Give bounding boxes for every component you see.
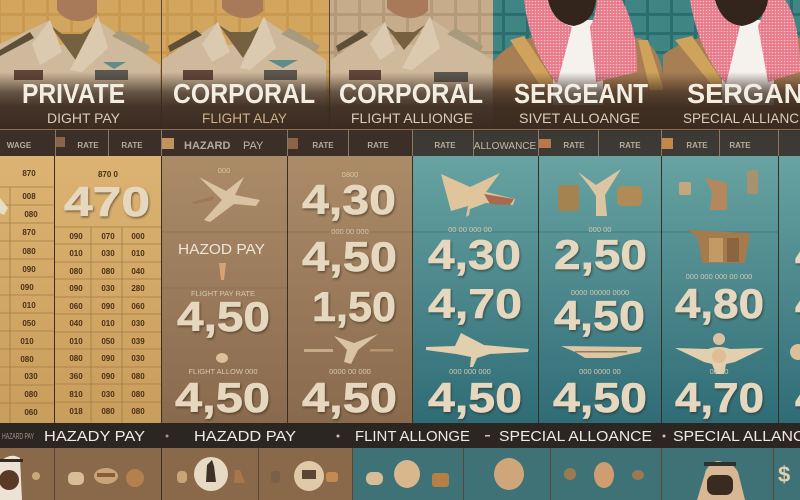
icon: pay badges: [68, 468, 144, 487]
column: special allowance: [539, 156, 661, 423]
column: private main table: 090: [101, 354, 115, 363]
column: private left table: 050: [22, 319, 36, 328]
table header row: RATE: [367, 141, 389, 150]
icon: private soldier: [0, 0, 160, 130]
icon: badge cluster: [679, 170, 758, 210]
table header row: HAZARD: [184, 140, 230, 152]
number: 4,50 lower: 4,50: [175, 374, 270, 421]
number: 4,50: 4,50: [554, 292, 645, 339]
column: corporal rates: 000 00 000: [331, 227, 369, 236]
bottom panel: teal first: [353, 448, 463, 500]
table header row: RATE: [563, 141, 585, 150]
column: private main table: 010: [131, 249, 145, 258]
column: special allowance: 000 00: [589, 225, 611, 234]
column: hazard pay: 000: [218, 166, 230, 175]
column: private main table: 060: [69, 302, 83, 311]
bottom panel: teal third: [551, 448, 661, 500]
column: private main table: 039: [131, 337, 145, 346]
column: private main table: 080: [131, 407, 145, 416]
column: private left table: 080: [24, 210, 38, 219]
column: special allowance second: 00 00: [710, 367, 728, 376]
icon: small coin: [32, 472, 40, 480]
column: private main table: 080: [69, 267, 83, 276]
column: private main table: 080: [131, 372, 145, 381]
table header row: RATE: [434, 141, 456, 150]
footer band: [0, 423, 800, 448]
table header row: WAGE: [7, 141, 32, 150]
column: private main table: 050: [101, 337, 115, 346]
column: private main table: 060: [131, 302, 145, 311]
number: 2,50: 2,50: [554, 231, 647, 278]
icon: sergeant in thobe and shemagh: [493, 0, 664, 130]
label: hazard pay: HAZOD PAY: [178, 241, 265, 258]
icon: corporal soldier: [162, 0, 326, 130]
icon: dollar sign: $: [778, 462, 790, 487]
column: private main table: 080: [101, 407, 115, 416]
number: 4,30: 4,30: [302, 176, 396, 223]
footer band: HAZARD PAY: [2, 432, 34, 441]
column: private main table: 030: [131, 354, 145, 363]
table header row: RATE: [686, 141, 708, 150]
number: 4,50: 4,50: [177, 293, 270, 340]
column: private main table: 090: [101, 372, 115, 381]
table header row: PAY: [243, 140, 264, 152]
icon: treasure chest: [688, 230, 750, 263]
heading: sergeant: SERGEANT: [514, 78, 648, 109]
footer band: FLINT ALLONGE: [355, 428, 470, 445]
column: private main table: 870 0: [98, 170, 119, 179]
subheading: corporal second: FLIGHT ALLIONGE: [351, 110, 473, 126]
heading: corporal: CORPORAL: [173, 78, 315, 109]
column: private left table: 870: [22, 228, 36, 237]
bottom panel: brown left: [0, 448, 161, 500]
number: 4,70: 4,70: [428, 280, 522, 327]
number: 4,70: 470: [64, 178, 150, 225]
column: private main table: 000: [131, 232, 145, 241]
table header row: RATE: [121, 141, 143, 150]
icon: large coin: [494, 458, 524, 490]
icon: small medal: [216, 353, 228, 363]
panel: sergeant special portrait: [663, 0, 800, 130]
column: private left table: 870: [22, 169, 36, 178]
column: corporal rates: 0800: [342, 170, 358, 179]
icon: sergeant special in thobe and shemagh: [663, 0, 800, 130]
column: special allowance second: 000 000 000 00 000: [686, 272, 752, 281]
number: 4,50: 4,50: [302, 233, 397, 280]
column: private main table: 070: [101, 232, 115, 241]
footer band: HAZADY PAY: [44, 428, 145, 445]
number: 4,70: 4,70: [675, 374, 764, 421]
panel: corporal portrait: [162, 0, 329, 130]
column: flight allowance: 000 000 000: [449, 367, 491, 376]
column: private left table: 030: [24, 372, 38, 381]
column: special allowance: 0000 00000 0000: [571, 288, 629, 297]
panel: private portrait: [0, 0, 161, 130]
table header row: RATE: [619, 141, 641, 150]
column: private main table: 090: [69, 284, 83, 293]
icon: tokens: [564, 462, 644, 488]
heading: private: PRIVATE: [22, 78, 125, 109]
column dividers: [54, 156, 779, 500]
column: corporal rates: [288, 156, 412, 423]
number: 4,80: 4,80: [675, 280, 764, 327]
number: 1,50: 1,50: [312, 283, 396, 330]
footer band: HAZADD PAY: [194, 428, 296, 445]
column: private main table: 010: [69, 249, 83, 258]
bottom panel: teal second: [464, 448, 550, 500]
column: right edge: [779, 156, 800, 423]
column: private main table: 010: [69, 337, 83, 346]
icon: winged emblem: [675, 333, 764, 374]
icon: jet: [441, 173, 515, 217]
column: private main table: 280: [131, 284, 145, 293]
icon: coin with figure: [177, 457, 245, 491]
column: private main table: 360: [69, 372, 83, 381]
column: flight allowance: [413, 156, 538, 423]
icon: robed figure: [0, 456, 23, 500]
icon: robed figure: [697, 461, 745, 500]
bottom panel: teal fourth: [662, 448, 773, 500]
column: hazard pay: FLIGHT PAY RATE: [191, 289, 255, 298]
panel: corporal flight portrait: [330, 0, 493, 130]
column: private main table: 010: [101, 319, 115, 328]
fade behind rank titles: [0, 72, 800, 130]
footer band: SPECIAL ALLOANCE: [499, 428, 652, 445]
column: private left table: 090: [22, 265, 36, 274]
table header row: [0, 129, 800, 156]
icon: small marker: [219, 263, 226, 280]
table header row: RATE: [729, 141, 751, 150]
panel: sergeant portrait: [493, 0, 664, 130]
column: private main table: 080: [131, 390, 145, 399]
column: private main table: 040: [131, 267, 145, 276]
column: private main table: 040: [69, 319, 83, 328]
column: private main table: 030: [131, 319, 145, 328]
column: private main table: [55, 156, 161, 423]
bottom panel: teal edge: [774, 448, 800, 500]
column: private left table: 010: [20, 337, 34, 346]
number: 4,50 lower: 4,50: [302, 374, 397, 421]
column: private left table: 080: [22, 247, 36, 256]
column: private main table: 090: [101, 302, 115, 311]
column: private left table: 060: [24, 408, 38, 417]
icon: plane wide: [304, 334, 393, 364]
icon: plane: [192, 177, 260, 222]
column: private main table: 030: [101, 284, 115, 293]
column: private main table: 030: [101, 249, 115, 258]
table header row: RATE: [77, 141, 99, 150]
icon: corporal flight soldier: [331, 0, 492, 130]
subheading: private: DIGHT PAY: [47, 110, 121, 126]
subheading: sergeant: SIVET ALLOANGE: [519, 110, 640, 126]
bottom panel: brown right: [259, 448, 352, 500]
column: private main table: 810: [69, 390, 83, 399]
icon: flat aircraft: [561, 346, 642, 358]
column: private left table: 008: [22, 192, 36, 201]
number: 4,30: 4,30: [428, 231, 521, 278]
column: private main table: 018: [69, 407, 83, 416]
column: private main table: 090: [69, 232, 83, 241]
column: private left table: 090: [20, 283, 34, 292]
heading: corporal second: CORPORAL: [339, 78, 483, 109]
column: hazard pay: FLIGHT ALLOW 000: [188, 367, 258, 376]
column: private left table: 010: [22, 301, 36, 310]
column: private main table: 080: [101, 267, 115, 276]
icon: plane with badges: [558, 169, 642, 216]
column: private main table: 080: [69, 354, 83, 363]
column: hazard pay: [162, 156, 287, 423]
column: private left table: [0, 156, 55, 423]
column: corporal rates: 0000 00 000: [329, 367, 371, 376]
icon: medals: [366, 460, 449, 488]
column: private left table: 080: [20, 355, 34, 364]
number: 4,50: 4,50: [428, 374, 522, 421]
column: private left table: 080: [24, 390, 38, 399]
column: special allowance: 000 0000 00: [579, 367, 621, 376]
number: 4,50 lower: 4,50: [553, 374, 647, 421]
column: special allowance second: [662, 156, 778, 423]
column: private main table: 030: [101, 390, 115, 399]
table header row: ALLOWANCE: [474, 141, 537, 152]
table header row: RATE: [312, 141, 334, 150]
column: flight allowance: 00 00 000 00: [448, 225, 492, 234]
subheading: corporal: FLIGHT ALAY: [202, 110, 288, 126]
bottom panel: brown middle: [162, 448, 258, 500]
icon: coin stack: [271, 461, 338, 491]
icon: long aircraft: [426, 333, 529, 367]
